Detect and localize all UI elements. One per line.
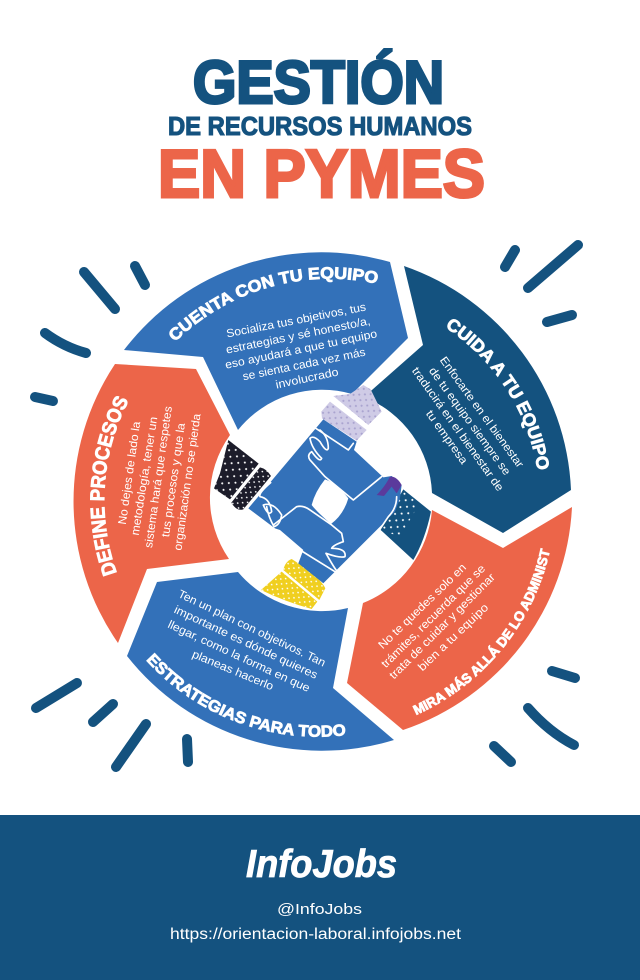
- panel: estrategias para todo: [127, 572, 394, 751]
- heading: mira más allá de lo administ: MIRA MÁS ALLÁ DE LO ADMINIST: [412, 548, 550, 716]
- body text: cuenta con tu equipo: se sienta cada vez más: [242, 347, 367, 383]
- lavender sleeve: [321, 385, 382, 441]
- body text: define procesos: metodología, tener un: [130, 416, 160, 536]
- illustration: four joined hands: [214, 385, 431, 609]
- body text: cuenta con tu equipo: Socializa tus objetivos, tus: [225, 301, 367, 340]
- hands: [248, 419, 402, 583]
- title line: GESTIÓN: GESTIÓN: [193, 49, 444, 116]
- heading: cuida a tu equipo: CUIDA A TU EQUIPO: [447, 319, 549, 470]
- burst marks: top right: [505, 245, 578, 322]
- body text: define procesos: No dejes de lado la: [117, 420, 143, 525]
- body text: cuida a tu equipo: [409, 355, 526, 494]
- panel: cuida a tu equipo: [371, 266, 571, 533]
- burst marks: top left: [35, 266, 145, 401]
- body text: estrategias para todo: planeas hacerlo: [190, 649, 275, 693]
- title line: EN PYMES: EN PYMES: [158, 136, 485, 212]
- body text: mira más allá: No te quedes solo en: [376, 562, 469, 652]
- body text: estrategias para todo: Ten un plan con objetivos. Tan: [176, 588, 327, 669]
- body text: cuenta con tu equipo: eso ayudará a que tu equipo: [224, 328, 378, 372]
- body text: mira más allá: bien a tu equipo: [416, 602, 491, 674]
- body text: cuenta con tu equipo: estrategias y sé honesto/a,: [225, 315, 371, 357]
- black sleeve: [214, 440, 271, 510]
- body text: define procesos: organización no se pierda: [172, 412, 204, 551]
- centre gap: [312, 479, 348, 524]
- handle: @InfoJobs: [277, 902, 362, 918]
- url: https://orientacion-laboral.infojobs.net: [170, 926, 462, 943]
- panel: cuenta con tu equipo: [124, 252, 408, 430]
- body text: estrategias para todo: importante es dónde quieres: [172, 604, 319, 682]
- title: [158, 49, 485, 212]
- body text: estrategias para todo: [166, 588, 327, 695]
- heading: cuenta con tu equipo: CUENTA CON TU EQUIPO: [169, 266, 378, 340]
- body text: cuenta con tu equipo: [224, 301, 378, 392]
- panel: mira más allá: [347, 507, 572, 730]
- heading: define procesos: DEFINE PROCESOS: [90, 396, 128, 577]
- body text: cuida a tu equipo: tu empresa: [423, 408, 470, 467]
- body text: cuida a tu equipo: de tu equipo siempre se: [426, 365, 512, 478]
- body text: define procesos: [117, 405, 204, 551]
- body text: mira más allá: trámites, recuerda que se: [379, 563, 488, 671]
- heading: estrategias para todo: ESTRATEGIAS PARA TODO: [146, 652, 346, 738]
- purple finger detail: [377, 477, 402, 496]
- logo: InfoJobs: InfoJobs: [246, 843, 397, 886]
- body text: mira más allá: trata de cuidar y gestionar: [388, 571, 498, 682]
- body text: define procesos: tus procesos y que la: [160, 422, 188, 538]
- title line: DE RECURSOS HUMANOS: DE RECURSOS HUMANOS: [168, 113, 472, 141]
- dark blue sleeve: [381, 489, 431, 560]
- footer band: [0, 815, 640, 980]
- panel: define procesos: [74, 364, 230, 643]
- body text: cuida a tu equipo: Enfocarte en el bienestar: [437, 355, 526, 470]
- yellow sleeve: [261, 559, 325, 609]
- body text: cuenta con tu equipo: involucrado: [275, 366, 340, 392]
- burst marks: bottom right: [494, 671, 575, 762]
- body text: cuida a tu equipo: traducirá en el bienestar de: [409, 365, 505, 494]
- finger outlines: [260, 427, 397, 572]
- body text: define procesos: sistema hará que respetes: [143, 405, 175, 549]
- body text: estrategias para todo: llegar, como la forma en que: [166, 619, 311, 695]
- burst marks: bottom left: [36, 683, 188, 767]
